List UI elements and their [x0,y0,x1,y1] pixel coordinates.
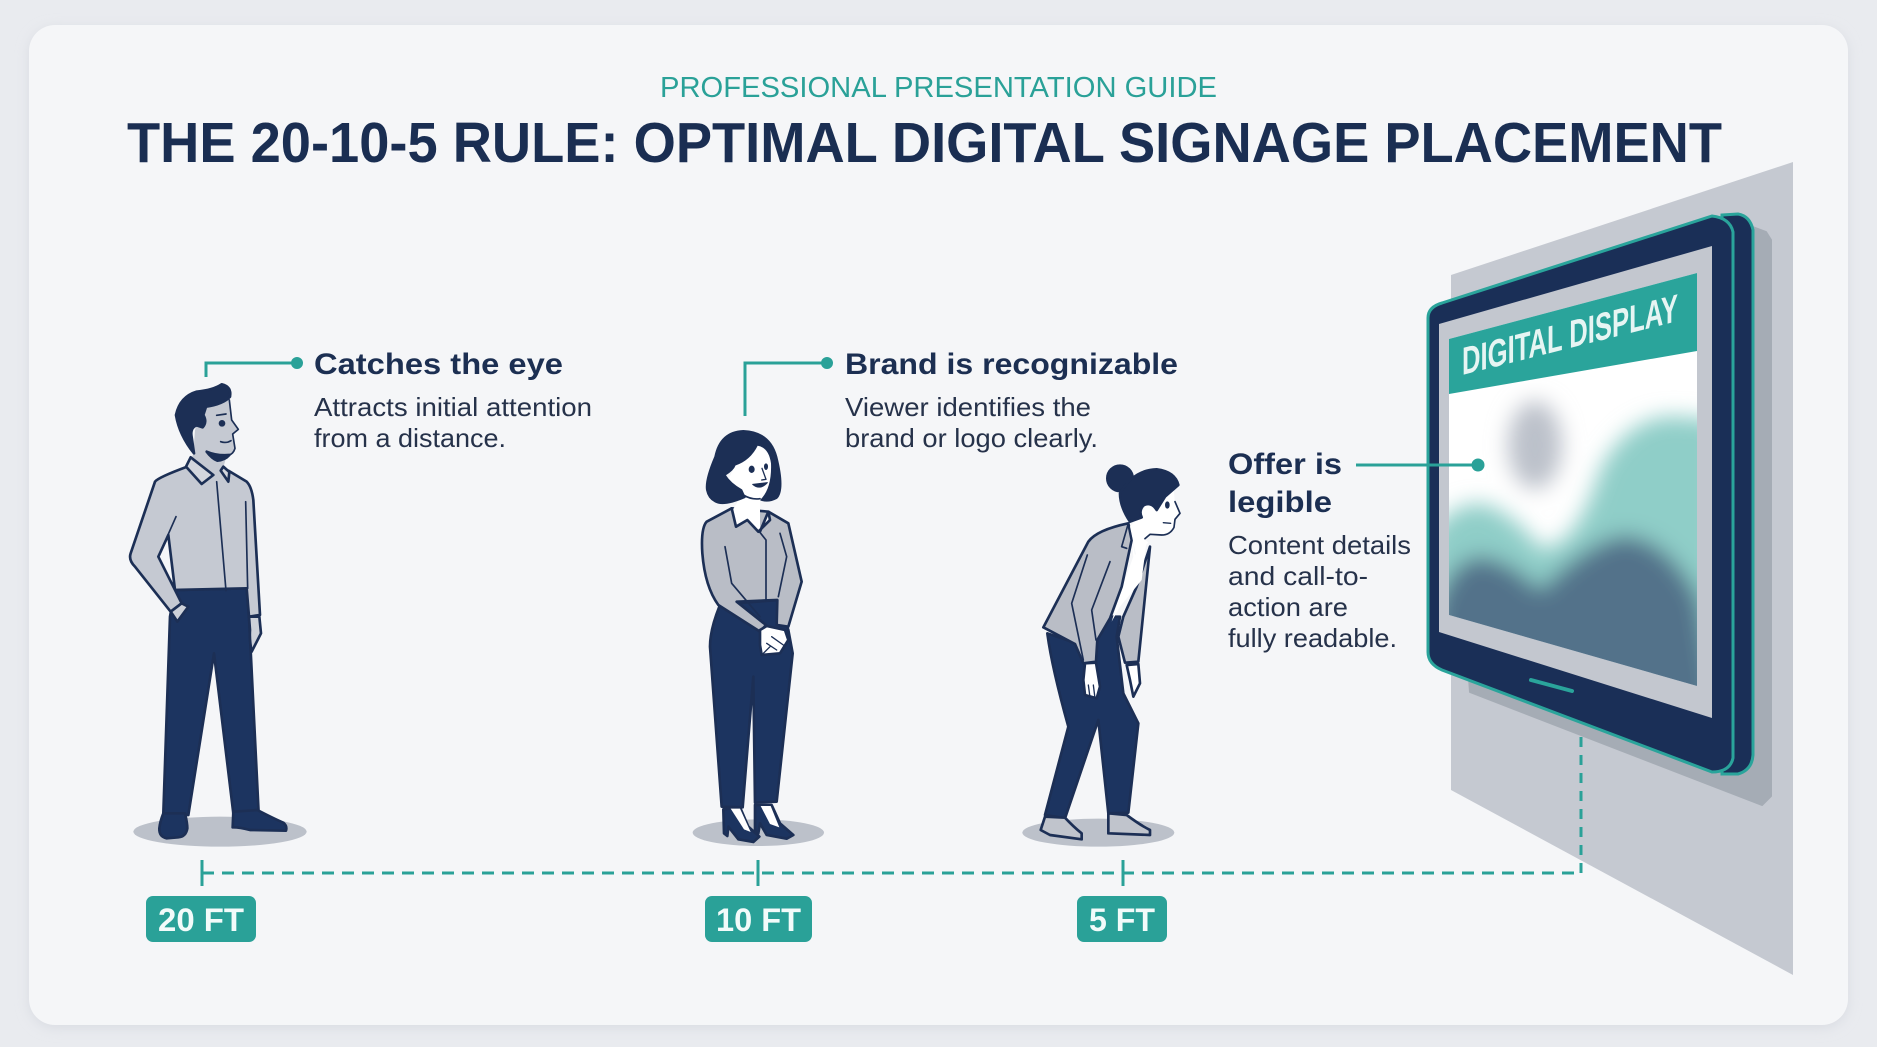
callout: catches the eye [314,348,592,453]
distance badge: 20 ft [146,896,256,942]
screen header banner [1449,273,1697,394]
indicator light [1531,680,1572,691]
figure: man at 20 ft [130,384,307,847]
callout: brand is recognizable [845,348,1178,453]
callout: offer is legible [1228,448,1411,653]
callout: offer is legible: legible [1228,486,1332,519]
subtitle: PROFESSIONAL PRESENTATION GUIDE [660,72,1217,104]
leaning woman head [1107,466,1180,555]
distance badge: 5 ft [1077,896,1167,942]
connector: offer label to screen [1356,460,1483,470]
title: THE 20-10-5 RULE: OPTIMAL DIGITAL SIGNAGE PLACEMENT [127,111,1722,175]
man head [176,384,238,477]
callout: offer is legible: action are [1228,592,1348,622]
callout: brand is recognizable: brand or logo clearly. [845,423,1098,453]
wall [1451,162,1793,975]
distance badge: 5 ft: 5 FT [1089,902,1155,938]
woman head [706,431,781,532]
connector: woman to label [745,358,832,416]
callout: offer is legible: and call-to- [1228,561,1368,591]
distance badge: 10 ft: 10 FT [716,902,801,938]
callout: catches the eye: Catches the eye [314,348,563,381]
callout: offer is legible: fully readable. [1228,623,1397,653]
screen bezel [1439,246,1712,718]
screen header text: DIGITAL DISPLAY [1462,287,1678,384]
digital display [1428,214,1771,805]
callout: catches the eye: Attracts initial attention [314,392,592,422]
callout: catches the eye: from a distance. [314,423,506,453]
callout: brand is recognizable: Viewer identifies the [845,392,1091,422]
connector: man to label [206,358,302,377]
figure: woman leaning in at 5 ft [1022,466,1180,847]
figure: woman at 10 ft [693,431,824,846]
distance badge: 10 ft [705,896,812,942]
callout: offer is legible: Content details [1228,530,1411,560]
distance line: dashed measure from viewers to display [202,737,1581,886]
screen image [1449,273,1697,686]
callout: offer is legible: Offer is [1228,448,1342,481]
distance badge: 20 ft: 20 FT [158,902,244,938]
callout: brand is recognizable: Brand is recognizable [845,348,1178,381]
